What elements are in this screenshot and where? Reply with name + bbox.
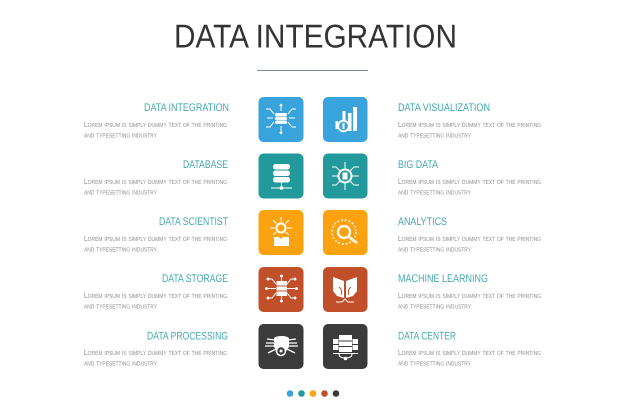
left text: data storage: and typesetting industry [84, 302, 157, 310]
right text: machine learning [398, 273, 541, 310]
right text: data center: DATA CENTER [398, 330, 456, 342]
left text: database [84, 159, 228, 196]
left text: data scientist [84, 216, 228, 254]
right text: data visualization: Lorem ipsum is simply dummy text of the printing [398, 120, 541, 129]
left text: data storage: DATA STORAGE [162, 273, 228, 285]
icon: data storage [258, 267, 304, 312]
icon: data integration [258, 97, 304, 142]
icon: data scientist [258, 210, 304, 255]
left text: data integration: DATA INTEGRATION [144, 102, 229, 114]
icon: big data [323, 154, 368, 198]
left text: database: Lorem ipsum is simply dummy text of the printing [84, 177, 227, 186]
right text: data visualization: DATA VISUALIZATION [398, 102, 490, 114]
right text: data visualization: and typesetting industry [398, 130, 471, 140]
left text: data processing: DATA PROCESSING [147, 330, 228, 342]
left text: data scientist: Lorem ipsum is simply dummy text of the printing [84, 234, 227, 243]
left text: database: and typesetting industry [84, 188, 157, 196]
icon: analytics [323, 210, 368, 255]
right text: machine learning: and typesetting industry [398, 302, 471, 310]
right text: data center: Lorem ipsum is simply dummy text of the printing [398, 348, 541, 357]
right text: big data [398, 159, 541, 196]
icon: data visualization [323, 97, 368, 142]
right text: big data: Lorem ipsum is simply dummy text of the printing [398, 177, 541, 186]
right text: data center [398, 330, 541, 368]
icon: data center [323, 324, 368, 369]
right text: big data: BIG DATA [398, 159, 439, 171]
title underline [257, 70, 368, 71]
left text: data processing: Lorem ipsum is simply dummy text of the printing [84, 348, 227, 357]
right text: data center: and typesetting industry [398, 358, 471, 368]
left text: data scientist: and typesetting industry [84, 244, 157, 254]
right text: analytics: and typesetting industry [398, 244, 471, 254]
right text: analytics: Lorem ipsum is simply dummy text of the printing [398, 234, 541, 243]
left text: data scientist: DATA SCIENTIST [159, 216, 228, 228]
left text: database: DATABASE [183, 159, 228, 171]
icon: machine learning [323, 267, 368, 312]
left text: data integration: and typesetting industry [84, 130, 157, 140]
icon: data processing [258, 324, 304, 369]
left text: data integration: Lorem ipsum is simply dummy text of the printing [84, 120, 227, 129]
right text: machine learning: Lorem ipsum is simply dummy text of the printing [398, 291, 541, 300]
left text: data storage [84, 273, 228, 310]
pagination dots [287, 390, 339, 397]
right text: data visualization [398, 102, 541, 140]
title: DATA INTEGRATION [174, 18, 457, 54]
right text: analytics: ANALYTICS [398, 216, 447, 228]
left text: data processing [84, 330, 228, 368]
icon: database [258, 154, 304, 198]
left text: data integration [84, 102, 229, 140]
right text: analytics [398, 216, 541, 254]
left text: data storage: Lorem ipsum is simply dummy text of the printing [84, 291, 227, 300]
right text: big data: and typesetting industry [398, 188, 471, 196]
left text: data processing: and typesetting industry [84, 358, 157, 368]
right text: machine learning: MACHINE LEARNING [398, 273, 488, 285]
